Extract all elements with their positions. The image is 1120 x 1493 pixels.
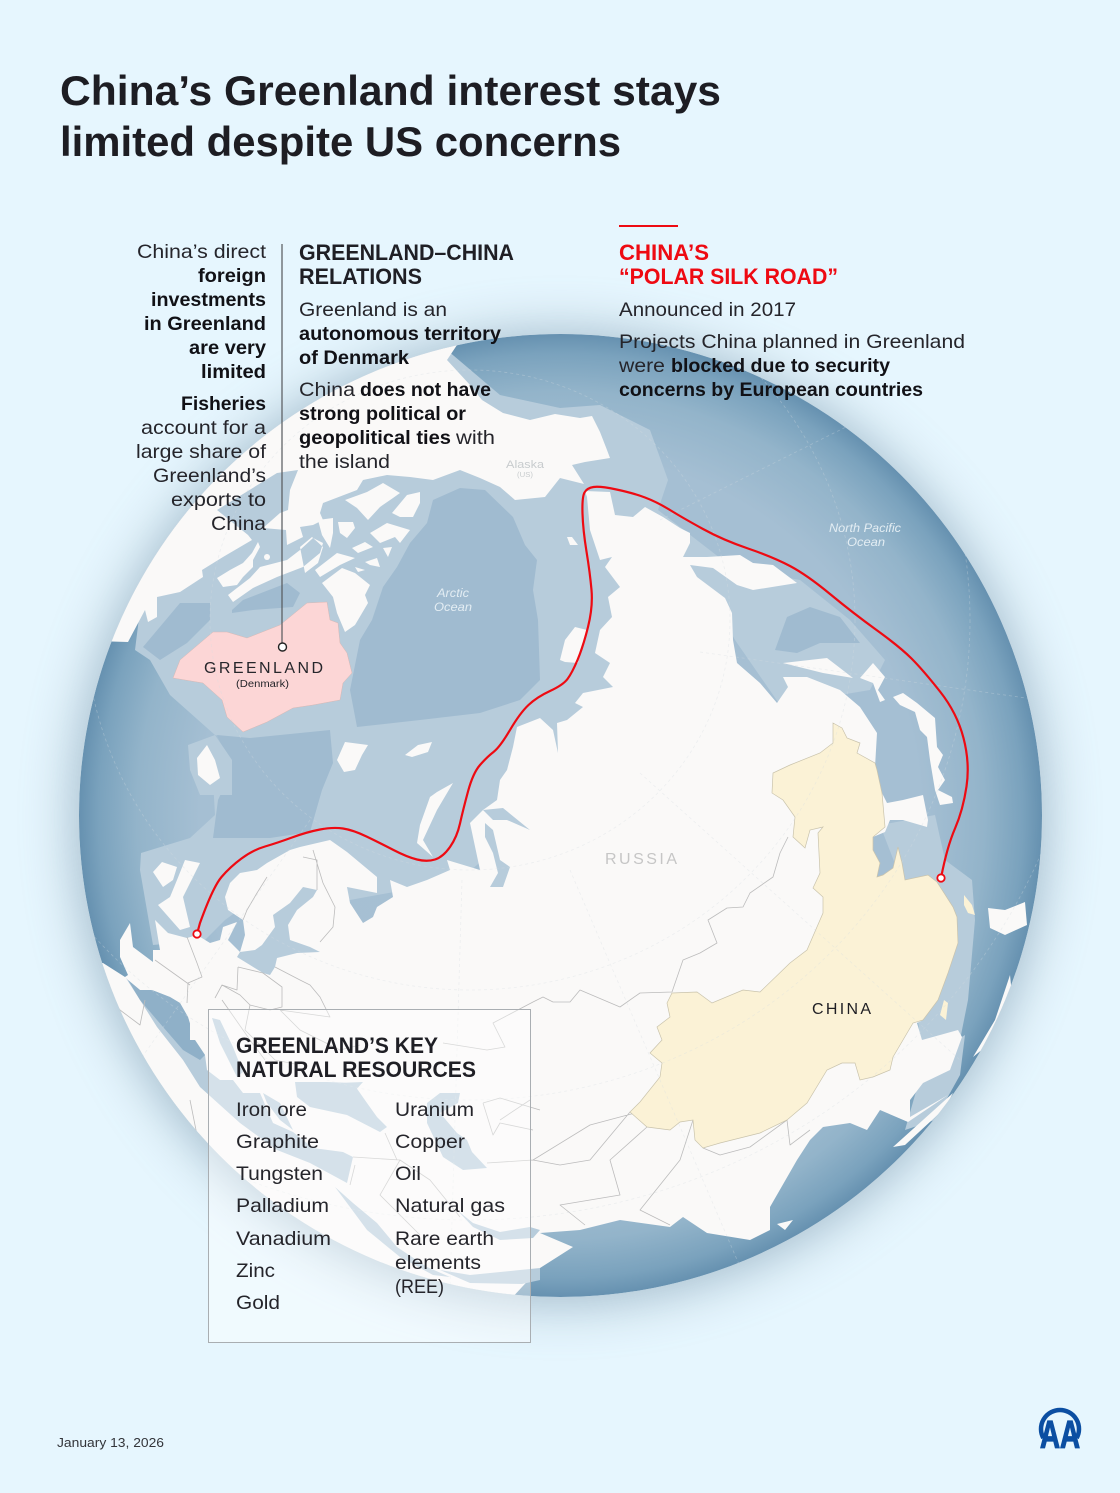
text: China's investments in Greenland: Fisheries [181, 393, 266, 415]
resource list: right: elements [395, 1252, 481, 1274]
island groups [153, 537, 1027, 1230]
text: China's investments in Greenland: large share of [136, 441, 267, 463]
resource list: left: Palladium [236, 1195, 329, 1217]
Red Sea [335, 1187, 450, 1277]
Corsica and Sardinia [190, 1023, 195, 1040]
date: January 13, 2026 [57, 1435, 164, 1450]
Persian Gulf [457, 1210, 540, 1240]
Norwegian Sea [213, 730, 333, 838]
resource list: left: Vanadium [236, 1228, 331, 1250]
Okhotsk deep [775, 607, 860, 653]
resource list: right [395, 1099, 505, 1298]
heading [299, 240, 514, 289]
text block: ties: with [455, 427, 495, 449]
route: Polar Silk Road [193, 487, 968, 938]
map label: North Pacific Ocean [829, 521, 901, 549]
resource list: left: Iron ore [236, 1099, 307, 1121]
map label: Arctic Ocean: Arctic [436, 586, 469, 600]
map label: Greenland [204, 660, 323, 690]
panel: natural resources [208, 1010, 530, 1342]
resource list: right: Rare earth [395, 1228, 494, 1250]
Labrador Sea deep [143, 603, 210, 660]
panel: Polar Silk Road [618, 225, 965, 401]
text block: ties [299, 379, 495, 473]
Sea of Okhotsk shelf [706, 569, 885, 702]
title: China’s Greenland interest stays [60, 67, 721, 114]
route end: China [937, 874, 945, 882]
heading: GREENLAND’S KEY [236, 1033, 438, 1058]
icon: Anadolu Agency logo [1040, 1410, 1080, 1457]
text block: status: Greenland is an [299, 299, 447, 321]
map label: Arctic Ocean: Ocean [434, 600, 472, 614]
text: China's investments in Greenland: China’s direct [137, 241, 267, 263]
text: China's investments in Greenland: account for a [141, 417, 266, 439]
heading: “POLAR SILK ROAD” [619, 264, 838, 289]
text block: ties: does not have [360, 379, 491, 401]
red accent rule [619, 225, 678, 227]
text block: ties: geopolitical ties [299, 427, 451, 449]
Mediterranean [126, 978, 353, 1183]
title [60, 67, 721, 165]
text: China's investments in Greenland: in Greenland [144, 313, 266, 335]
heading: GREENLAND–CHINA [299, 240, 514, 265]
resource list: right: Copper [395, 1131, 466, 1153]
text: China's investments in Greenland [136, 241, 267, 535]
title: limited despite US concerns [60, 118, 621, 165]
icon: Anadolu Agency logo: AA [1040, 1414, 1080, 1457]
panel box [208, 1010, 530, 1342]
text block: announced: Announced in 2017 [619, 299, 796, 321]
panel: Greenland-China relations [299, 240, 514, 473]
deep Arctic basin [350, 488, 540, 727]
continental shelf [135, 350, 720, 945]
heading: RELATIONS [299, 264, 422, 289]
resource list: right: Uranium [395, 1099, 474, 1121]
Adriatic and Aegean [212, 1018, 293, 1130]
Black Sea [295, 1082, 387, 1132]
East China Sea shelf [880, 815, 975, 1040]
Canadian Arctic islands [217, 483, 420, 632]
text block: status [299, 299, 501, 369]
text: China's investments in Greenland: are very [189, 337, 266, 359]
text block: projects [618, 331, 965, 401]
Baltic Sea [237, 887, 320, 975]
resource list: right: Oil [395, 1163, 421, 1185]
Ob and Yenisei gulfs [483, 808, 530, 887]
text block: status: autonomous territory [299, 323, 501, 345]
text block: ties: strong political or [299, 403, 466, 425]
map label: Russia: RUSSIA [605, 851, 677, 868]
borders [119, 837, 810, 1236]
Iceland shelf [188, 735, 232, 795]
map label: Greenland: (Denmark) [236, 679, 289, 690]
graticule [94, 370, 1040, 1263]
heading: CHINA’S [619, 240, 709, 265]
map label: Alaska: (US) [517, 470, 534, 479]
text block: projects: concerns by European countries [619, 379, 923, 401]
map label: China: CHINA [812, 1001, 871, 1018]
resource list: left [236, 1099, 331, 1314]
leader line to Greenland [278, 244, 286, 651]
text block: ties: China [299, 379, 355, 401]
heading [619, 240, 838, 289]
text: China's investments in Greenland: investments [151, 289, 266, 311]
text: China's investments in Greenland: Greenland’s [153, 465, 266, 487]
resource list: left: Gold [236, 1292, 280, 1314]
globe shadow [74, 332, 1046, 1304]
map label: Alaska [506, 459, 545, 479]
resource list: left: Graphite [236, 1131, 319, 1153]
map label: Arctic Ocean [434, 586, 472, 614]
route start: Europe [193, 930, 201, 938]
text: China's investments in Greenland: China [211, 513, 266, 535]
heading [236, 1033, 476, 1082]
text block: ties: the island [299, 451, 390, 473]
Eurasia and Africa [60, 491, 962, 1300]
text block: status: of Denmark [299, 347, 409, 369]
Hainan [940, 1000, 948, 1020]
map label: Alaska: Alaska [506, 459, 545, 471]
map label: Greenland: GREENLAND [204, 660, 323, 677]
Baffin Bay deep [232, 583, 300, 613]
Greenland [173, 602, 352, 732]
ocean [79, 334, 1042, 1297]
text: China's investments in Greenland: limited [201, 361, 266, 383]
resource list: left: Zinc [236, 1260, 275, 1282]
text block: projects: were [618, 355, 665, 377]
western Mediterranean deep [128, 980, 205, 1060]
text: China's investments in Greenland: foreign [198, 265, 266, 287]
Taiwan [964, 895, 975, 915]
map label: North Pacific Ocean: Ocean [847, 535, 885, 549]
text block: projects: Projects China planned in Greenland [619, 331, 965, 353]
text block: projects: blocked due to security [671, 355, 890, 377]
map label: North Pacific Ocean: North Pacific [829, 521, 901, 535]
text: China's investments in Greenland: exports to [171, 489, 266, 511]
Gulf of Aden [440, 1268, 540, 1284]
North America [112, 345, 610, 642]
heading: NATURAL RESOURCES [236, 1057, 476, 1082]
Caspian Sea [427, 1093, 487, 1170]
resource list: left: Tungsten [236, 1163, 323, 1185]
China [630, 723, 958, 1148]
Sunda shelf [905, 1035, 965, 1130]
resource list: right: (REE) [395, 1276, 444, 1298]
globe map [79, 334, 1042, 1297]
resource list: right: Natural gas [395, 1195, 505, 1217]
